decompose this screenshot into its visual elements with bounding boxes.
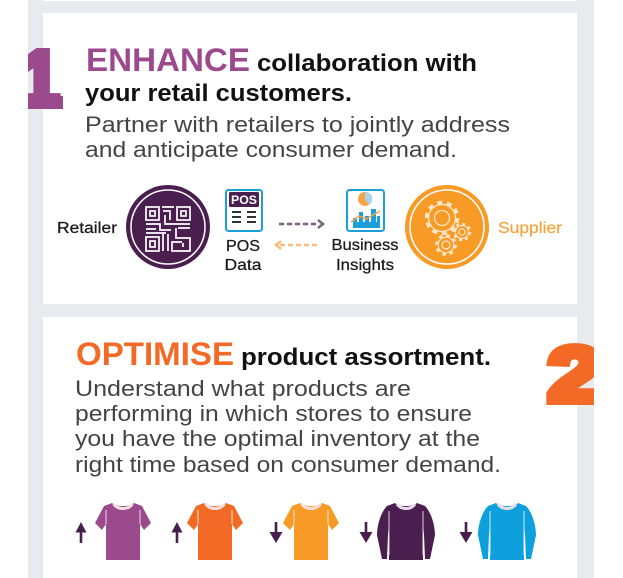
number 1: 1 bbox=[21, 36, 59, 122]
label: Insights: Insights bbox=[336, 257, 394, 274]
label: POS: POS bbox=[226, 238, 260, 255]
panel: enhance collaboration bbox=[21, 13, 577, 304]
icon: supplier gears circle bbox=[405, 185, 489, 269]
number 1 bbox=[28, 48, 63, 109]
body line three: you have the optimal inventory at the bbox=[75, 426, 480, 451]
icon: retailer QR circle bbox=[126, 185, 210, 269]
body line four: right time based on consumer demand. bbox=[75, 452, 501, 477]
body line two: performing in which stores to ensure bbox=[75, 401, 472, 426]
icon: POS data document: POS bbox=[231, 193, 257, 207]
icon: POS data document bbox=[226, 190, 262, 231]
heading: your retail customers: your retail customers. bbox=[85, 80, 352, 107]
number 2: 2 bbox=[548, 332, 602, 418]
arrow up: purple tee bbox=[76, 522, 86, 543]
label: Data: Data bbox=[224, 257, 262, 274]
panel: optimise product assortment bbox=[43, 317, 602, 578]
top panel remnant bbox=[43, 0, 577, 1]
body text line two: and anticipate consumer demand. bbox=[85, 137, 457, 162]
label: supplier: Supplier bbox=[498, 220, 562, 237]
label: retailer: Retailer bbox=[57, 220, 117, 237]
arrow: supplier to retailer bbox=[276, 241, 320, 249]
icon: purple t-shirt bbox=[95, 503, 151, 560]
arrow down: plum sweater bbox=[360, 522, 372, 543]
heading: product assortment: product assortment. bbox=[241, 344, 491, 371]
arrow up: orange tee bbox=[172, 522, 182, 543]
arrow: retailer to supplier bbox=[279, 220, 323, 228]
icon: amber t-shirt bbox=[283, 503, 339, 560]
heading: enhance: ENHANCE bbox=[86, 42, 250, 78]
icon: orange t-shirt bbox=[187, 503, 243, 560]
arrow down: amber tee bbox=[270, 522, 282, 543]
icon: business insights chart bbox=[347, 190, 384, 231]
icon: plum sweater bbox=[377, 503, 435, 560]
label: Business: Business bbox=[332, 237, 399, 254]
heading: collaboration with: collaboration with bbox=[257, 50, 477, 77]
heading: optimise: OPTIMISE bbox=[76, 336, 234, 372]
icon: blue sweater bbox=[478, 503, 536, 560]
body line one: Understand what products are bbox=[75, 376, 411, 401]
body text line one: Partner with retailers to jointly address bbox=[85, 112, 510, 137]
arrow down: blue sweater bbox=[460, 522, 472, 543]
